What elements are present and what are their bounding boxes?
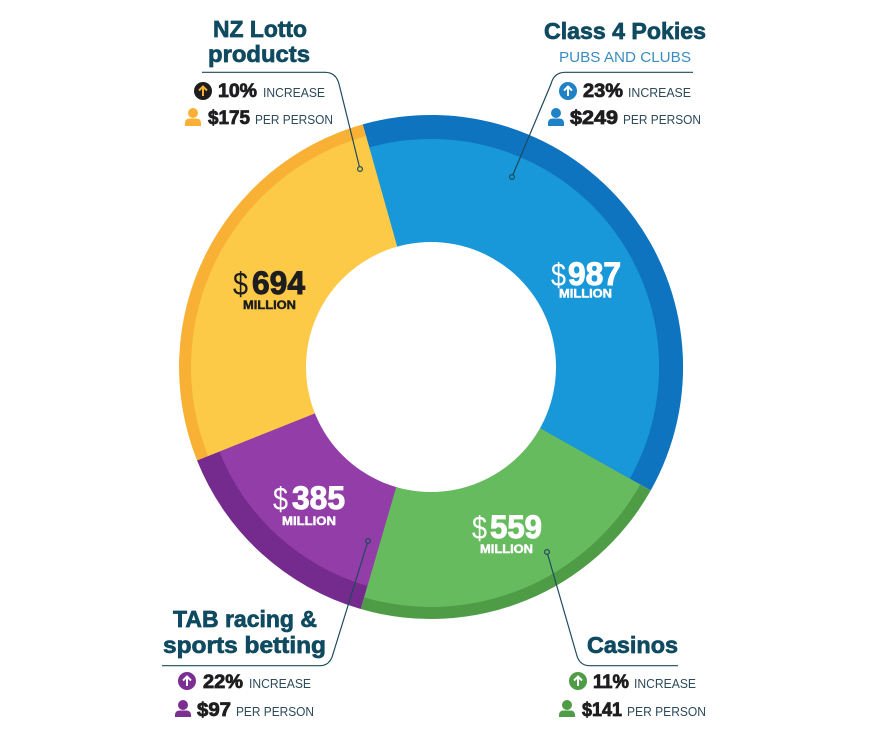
per person stat (570, 108, 701, 129)
icon: person (559, 700, 575, 717)
value: 559 million (472, 509, 542, 556)
increase stat: 11% (593, 672, 629, 693)
increase stat (203, 672, 311, 693)
icon: up arrow (559, 82, 577, 100)
callout: NZ Lotto products (185, 16, 362, 171)
per person stat (197, 700, 314, 721)
callout: TAB racing and sports betting (162, 539, 370, 721)
per person stat: $249 (570, 108, 618, 129)
leader line (162, 539, 370, 666)
increase stat: 22% (203, 672, 243, 693)
per person stat: $175 (208, 108, 250, 129)
value: 694 million: MILLION (243, 298, 296, 312)
value: 385 million: MILLION (282, 514, 336, 528)
value: 559 million: 559 (490, 509, 542, 545)
increase stat: INCREASE (634, 677, 696, 691)
icon: person (548, 108, 564, 126)
per person stat (582, 700, 706, 721)
per person stat: $97 (197, 700, 231, 721)
icon: up arrow (569, 672, 587, 690)
per person stat: PER PERSON (627, 705, 706, 719)
increase stat (593, 672, 696, 693)
per person stat (208, 108, 333, 129)
per person stat: PER PERSON (623, 113, 701, 127)
value: 987 million (551, 256, 621, 300)
increase stat: INCREASE (628, 86, 691, 100)
icon: person (185, 108, 201, 126)
leader line (545, 550, 678, 666)
heading (208, 16, 310, 67)
value: 694 million: 694 (252, 265, 305, 301)
donut hole (306, 242, 556, 492)
segment: TAB racing and sports betting (197, 367, 431, 609)
value: 694 million: $ (233, 266, 248, 302)
value: 694 million (233, 265, 305, 312)
value: 987 million: $ (551, 257, 566, 293)
icon: up arrow (194, 82, 212, 100)
per person stat: PER PERSON (255, 113, 333, 127)
heading: TAB racing & (173, 606, 317, 632)
value: 559 million: MILLION (480, 542, 533, 556)
per person stat: $141 (582, 700, 622, 721)
increase stat: INCREASE (249, 677, 311, 691)
increase stat: 23% (583, 81, 623, 102)
value: 385 million: $ (273, 481, 288, 517)
heading (163, 606, 326, 658)
value: 559 million: $ (472, 510, 487, 546)
heading: sports betting (163, 632, 326, 658)
donut chart (179, 115, 683, 619)
increase stat (583, 81, 691, 102)
value: 987 million: 987 (568, 256, 621, 292)
callout: Casinos (545, 550, 706, 721)
segment: Class 4 Pokies (363, 115, 683, 490)
heading: products (208, 41, 310, 67)
value: 385 million (273, 480, 345, 528)
value: 987 million: MILLION (559, 286, 612, 300)
value: 385 million: 385 (292, 480, 345, 516)
leader line (510, 72, 693, 179)
increase stat: 10% (218, 81, 257, 102)
heading: NZ Lotto (213, 16, 307, 42)
leader line (202, 72, 362, 171)
segment: Casinos (361, 367, 651, 619)
icon: up arrow (178, 672, 196, 690)
per person stat: PER PERSON (236, 705, 314, 719)
increase stat (218, 81, 325, 102)
icon: person (175, 700, 191, 717)
heading: Casinos (587, 632, 678, 658)
heading: Class 4 Pokies (544, 18, 706, 44)
subheading: PUBS AND CLUBS (559, 50, 691, 66)
callout: Class 4 Pokies (510, 18, 706, 179)
increase stat: INCREASE (263, 86, 325, 100)
segment: NZ Lotto products (179, 124, 431, 460)
